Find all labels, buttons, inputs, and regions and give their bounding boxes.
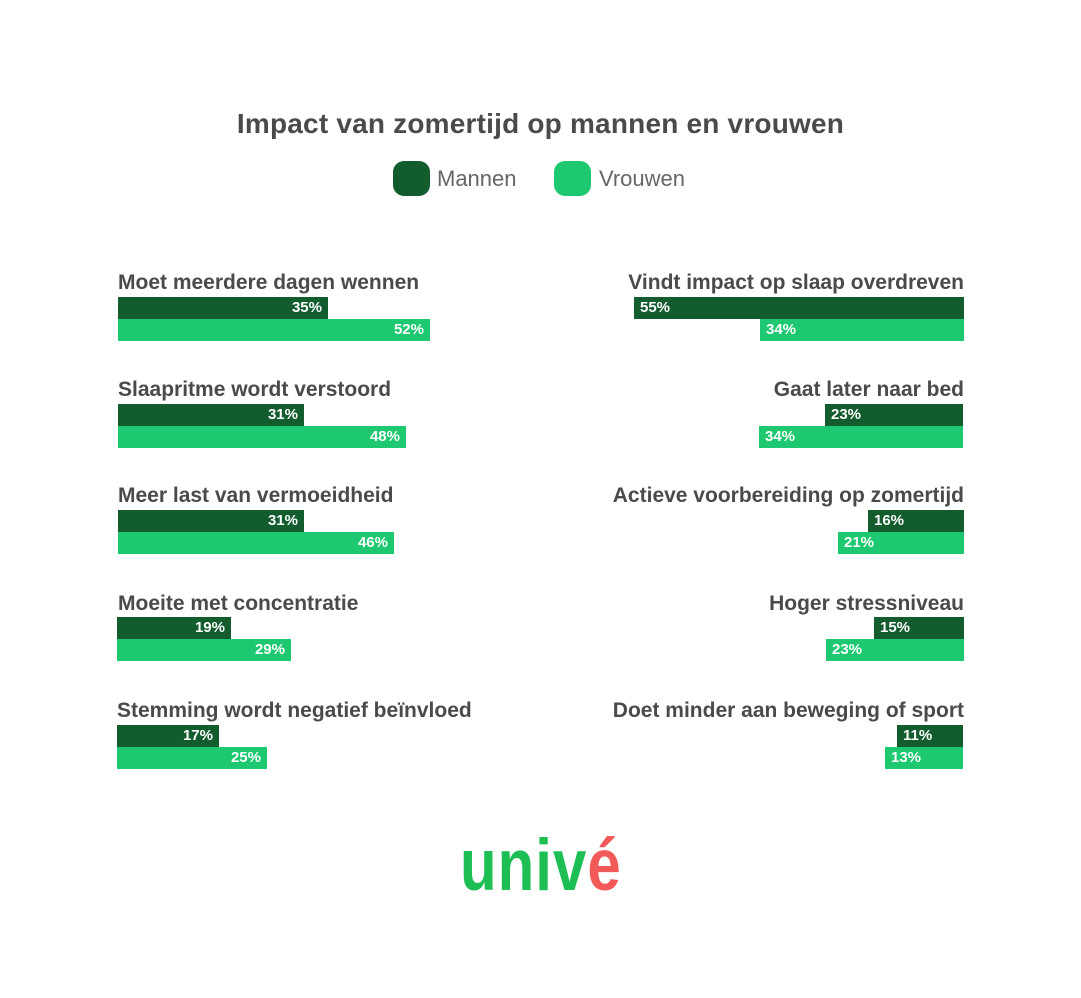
bar 23: 23% <box>831 406 861 423</box>
bar women 52 <box>118 319 430 341</box>
label: Moet meerdere dagen wennen <box>118 271 419 294</box>
bar 31 <box>118 404 304 426</box>
panel: right column <box>613 271 964 769</box>
bar 15 <box>874 617 964 639</box>
title: Impact van zomertijd op mannen en vrouwen <box>237 108 844 139</box>
bar 48: 48% <box>370 428 400 445</box>
bar 13: 13% <box>891 749 921 766</box>
bar 17: 17% <box>183 727 213 744</box>
bar 31 <box>118 510 304 532</box>
bar 23: 23% <box>832 641 862 658</box>
bar 29: 29% <box>255 641 285 658</box>
label: Hoger stressniveau <box>769 592 964 615</box>
panel: left column <box>117 271 472 769</box>
legend text vrouwen: Vrouwen <box>599 166 685 191</box>
bar 25 <box>117 747 267 769</box>
label: Gaat later naar bed <box>774 378 964 401</box>
bar 16: 16% <box>874 512 904 529</box>
bar 15: 15% <box>880 619 910 636</box>
bar 55: 55% <box>640 299 670 316</box>
bar 48 <box>118 426 406 448</box>
bar men 35: 35% <box>292 299 322 316</box>
legend: mannen <box>393 161 430 196</box>
bar 21 <box>838 532 964 554</box>
bar 19 <box>117 617 231 639</box>
logo text: univé <box>460 824 622 906</box>
bar 11: 11% <box>903 727 932 744</box>
bar 55 <box>634 297 964 319</box>
bar 31: 31% <box>268 512 298 529</box>
label: Moeite met concentratie <box>118 592 358 615</box>
bar 34: 34% <box>766 321 796 338</box>
legend: vrouwen <box>554 161 591 196</box>
label: Actieve voorbereiding op zomertijd <box>613 484 964 507</box>
bar 23 <box>826 639 964 661</box>
bar 23 <box>825 404 963 426</box>
bar 34 <box>760 319 964 341</box>
legend text mannen: Mannen <box>437 166 517 191</box>
bar 11 <box>897 725 963 747</box>
bar 31: 31% <box>268 406 298 423</box>
bar 25: 25% <box>231 749 261 766</box>
label: Doet minder aan beweging of sport <box>613 699 964 722</box>
bar 29 <box>117 639 291 661</box>
bar 46: 46% <box>358 534 388 551</box>
bar 16 <box>868 510 964 532</box>
bar 19: 19% <box>195 619 225 636</box>
bar men 35 <box>118 297 328 319</box>
bar women 52: 52% <box>394 321 424 338</box>
bar 17 <box>117 725 219 747</box>
bar 46 <box>118 532 394 554</box>
bar 34 <box>759 426 963 448</box>
legend <box>393 161 685 196</box>
label: Slaapritme wordt verstoord <box>118 378 391 401</box>
label: Meer last van vermoeidheid <box>118 484 393 507</box>
bar 21: 21% <box>844 534 874 551</box>
bar 13 <box>885 747 963 769</box>
bar 34: 34% <box>765 428 795 445</box>
label: Stemming wordt negatief beïnvloed <box>117 699 472 722</box>
label: Vindt impact op slaap overdreven <box>628 271 964 294</box>
